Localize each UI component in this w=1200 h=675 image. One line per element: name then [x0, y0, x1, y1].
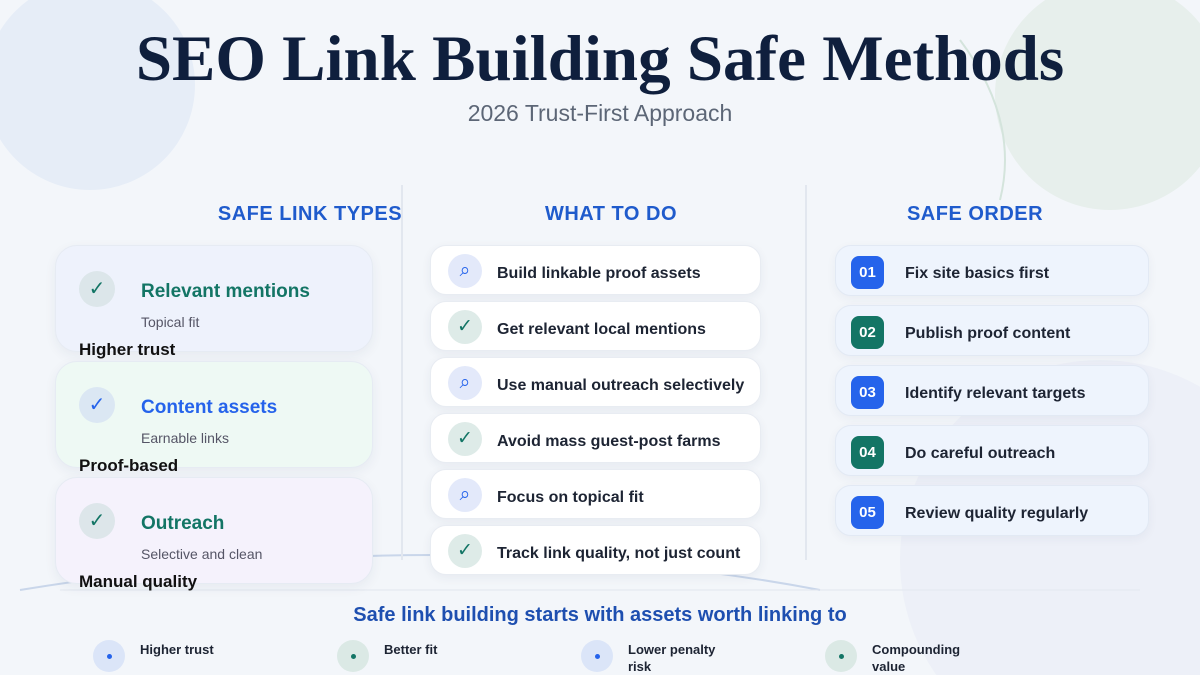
item: avoid mass guest-post farms — [430, 413, 761, 463]
card: content assets — [55, 361, 373, 468]
step 02: 02 — [859, 324, 876, 341]
heading: safe link types: SAFE LINK TYPES — [218, 203, 402, 225]
card: outreach: Outreach — [141, 513, 224, 534]
benefit: lower penalty risk: risk — [628, 659, 651, 674]
card: content assets: Proof-based — [79, 456, 178, 475]
benefit: compounding value: value — [872, 659, 905, 674]
item: focus on topical fit — [430, 469, 761, 519]
item: build linkable proof assets — [430, 245, 761, 295]
card: relevant mentions: Relevant mentions — [141, 281, 310, 302]
item: track link quality: Track link quality, not just count — [497, 545, 740, 562]
item: build linkable proof assets: ⌕ — [460, 260, 470, 281]
item: use manual outreach — [430, 357, 761, 407]
step 02 — [835, 305, 1149, 356]
step 05: 05 — [859, 504, 876, 521]
item: avoid mass guest-post farms: ✓ — [457, 428, 473, 449]
card: outreach: ✓ — [89, 510, 105, 532]
step 05 — [835, 485, 1149, 536]
title: SEO Link Building Safe Methods — [136, 23, 1064, 95]
benefit: lower penalty risk: Lower penalty — [628, 642, 715, 657]
item: avoid mass guest-post farms: Avoid mass guest-post farms — [497, 433, 720, 450]
heading: what to do: WHAT TO DO — [545, 203, 677, 225]
heading: safe order: SAFE ORDER — [907, 203, 1043, 225]
item: get relevant local mentions — [430, 301, 761, 351]
step 04: 04 — [859, 444, 876, 461]
step 05: Review quality regularly — [905, 505, 1088, 522]
item: track link quality: ✓ — [457, 540, 473, 561]
card: outreach — [55, 477, 373, 584]
card: outreach: Selective and clean — [141, 546, 262, 562]
item: focus on topical fit: ⌕ — [460, 484, 470, 505]
footer heading: Safe link building starts with assets worth linking to — [353, 604, 847, 626]
step 01: 01 — [859, 264, 876, 281]
item: track link quality — [430, 525, 761, 575]
benefit: better fit — [337, 640, 438, 672]
benefit: compounding value — [825, 640, 960, 674]
step 01 — [835, 245, 1149, 296]
subtitle: 2026 Trust-First Approach — [468, 100, 732, 126]
step 03: 03 — [859, 384, 876, 401]
benefit: lower penalty risk — [581, 640, 716, 674]
card: relevant mentions: Topical fit — [141, 314, 199, 330]
card: content assets: ✓ — [89, 394, 105, 416]
item: build linkable proof assets: Build linkable proof assets — [497, 265, 701, 282]
item: use manual outreach: ⌕ — [460, 372, 470, 393]
card: relevant mentions: ✓ — [89, 278, 105, 300]
card: relevant mentions: Higher trust — [79, 340, 175, 359]
benefit: higher trust — [93, 640, 214, 672]
benefit: better fit: Better fit — [384, 642, 437, 657]
step 02: Publish proof content — [905, 325, 1070, 342]
item: get relevant local mentions: Get relevant local mentions — [497, 321, 706, 338]
step 03 — [835, 365, 1149, 416]
benefit: compounding value: Compounding — [872, 642, 960, 657]
card: relevant mentions — [55, 245, 373, 352]
card: content assets: Earnable links — [141, 430, 229, 446]
item: use manual outreach: Use manual outreach selectively — [497, 377, 744, 394]
step 01: Fix site basics first — [905, 265, 1049, 282]
card: outreach: Manual quality — [79, 572, 197, 591]
step 04: Do careful outreach — [905, 445, 1055, 462]
item: get relevant local mentions: ✓ — [457, 316, 473, 337]
item: focus on topical fit: Focus on topical fit — [497, 489, 644, 506]
step 03: Identify relevant targets — [905, 385, 1086, 402]
card: content assets: Content assets — [141, 397, 277, 418]
benefit: higher trust: Higher trust — [140, 642, 214, 657]
step 04 — [835, 425, 1149, 476]
